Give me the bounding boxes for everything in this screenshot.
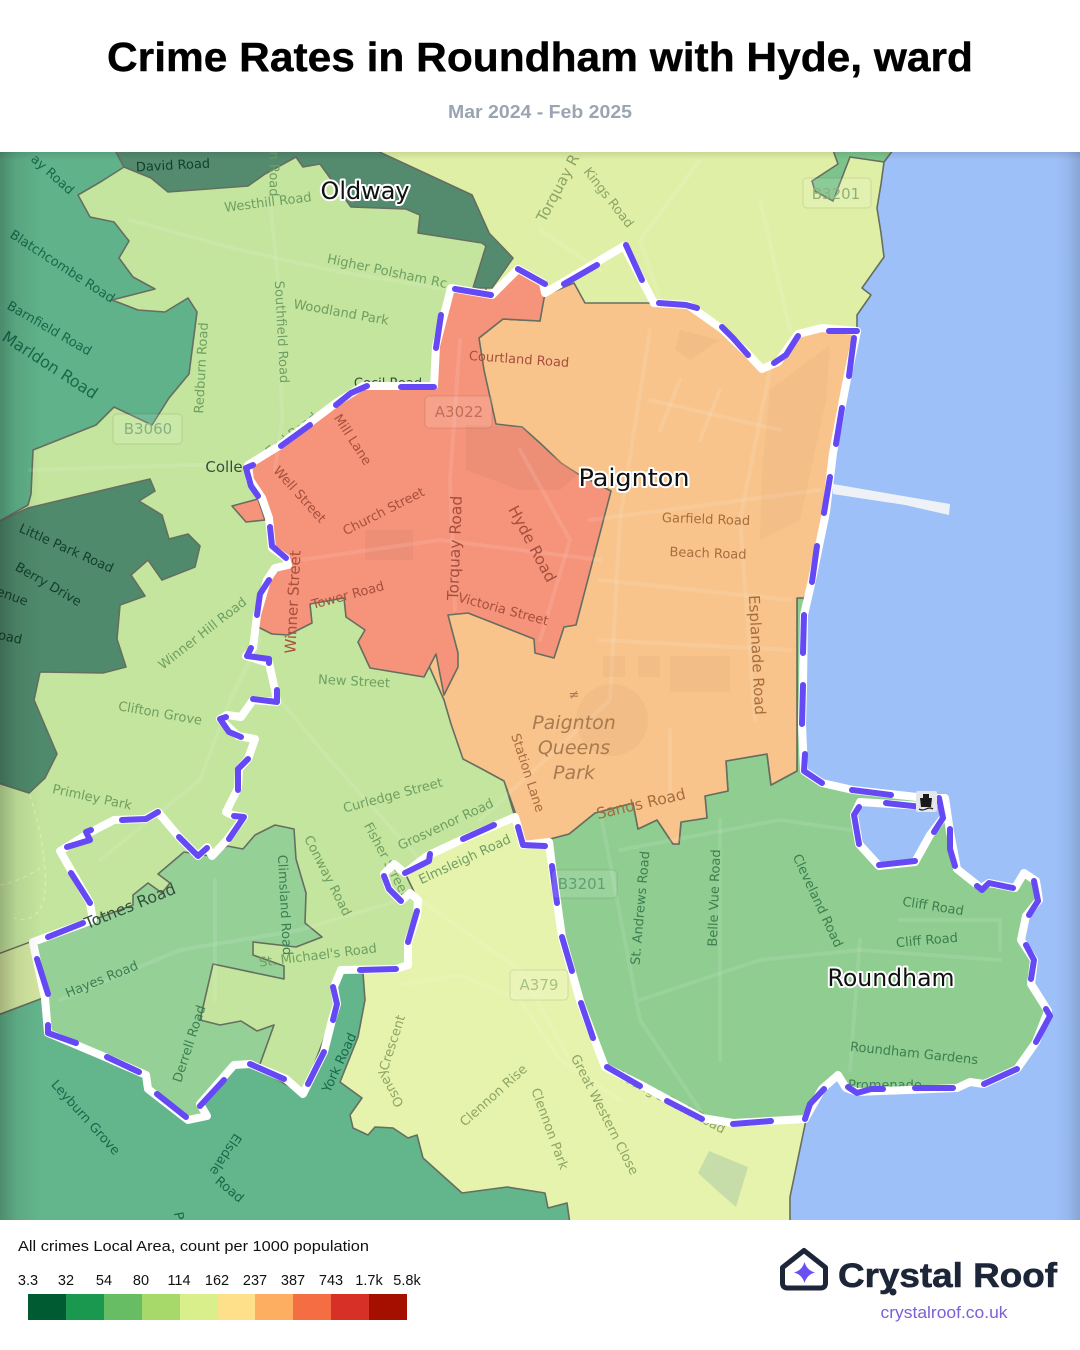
legend scale labels: 3.3 [18, 1273, 38, 1289]
legend colour ramp [28, 1294, 407, 1320]
road labels: Elsdale [206, 1130, 244, 1178]
road labels: Leyburn Grove [47, 1078, 123, 1158]
region: north dark green (Oldway) [115, 150, 513, 288]
road labels: New Street [318, 673, 390, 691]
road number labels: A3022 [435, 403, 483, 421]
harbour water [858, 806, 940, 862]
road labels: Road [212, 1174, 246, 1206]
legend scale labels: 1.7k [355, 1273, 383, 1289]
road number labels: B3201 [558, 875, 606, 893]
region: lower-left pale strip [0, 942, 41, 1013]
road labels: Colle [205, 458, 243, 476]
road labels: n Road [266, 152, 280, 196]
road labels: Southfield Road [271, 280, 291, 384]
road labels: Mill Lane [330, 412, 374, 468]
road labels: Conway Road [300, 833, 354, 919]
road labels: Well Street [270, 464, 328, 526]
orange land use patches [576, 330, 830, 756]
road labels [0, 151, 979, 1221]
road labels: Climsland Road [274, 854, 294, 956]
subtitle: date range: Mar 2024 - Feb 2025 [448, 102, 632, 122]
road labels: Osney [374, 1066, 408, 1109]
park label: Paignton Queens Park: Paignton [532, 712, 616, 734]
road labels: Tower Road [309, 579, 386, 613]
road number labels: A379 [520, 976, 558, 994]
region: small patch north-east [812, 150, 893, 201]
title: Crime Rates in Roundham with Hyde, ward [107, 34, 973, 80]
road labels: Primley Park [51, 782, 134, 814]
icon: railway station: ≠ [569, 688, 579, 703]
road labels: Garfield Road [662, 511, 750, 529]
road labels: Derrell Road [170, 1004, 210, 1084]
dashed footpaths [0, 795, 45, 920]
road boxes [113, 178, 871, 1000]
road labels: Blatchcombe Road [7, 228, 117, 306]
road labels: Berry Drive [12, 560, 84, 610]
logo: Crystal Roof [782, 1250, 1058, 1322]
map vignette [0, 152, 1080, 1220]
region: south-west teal [0, 972, 570, 1224]
road labels: Marldon Road [0, 327, 101, 403]
region: north-east pale green [382, 152, 892, 364]
road labels: Winner Street [281, 550, 305, 654]
road labels: Grosvenor Road [396, 796, 496, 854]
road network [30, 160, 1000, 1110]
road labels: Hayes Road [64, 959, 140, 1001]
ward boundary: purple dashes [37, 245, 1050, 1124]
road labels: Kings Road [580, 165, 636, 231]
sea [790, 152, 1080, 1220]
road labels: Clennon Rise [457, 1062, 531, 1130]
legend [18, 1238, 421, 1320]
road labels: Beach Road [669, 545, 747, 563]
road labels: Cliff Road [895, 931, 959, 951]
road labels: Crescent [377, 1013, 409, 1073]
road labels: Clifton Grove [117, 699, 203, 729]
road labels: Victoria Street [456, 591, 550, 629]
road labels: Cliff Road [901, 895, 965, 919]
legend scale labels: 387 [281, 1273, 305, 1289]
road labels: Higher Polsham Rc [326, 252, 448, 292]
road labels: Redburn Road [192, 322, 212, 414]
park label: Paignton Queens Park: Queens [538, 737, 610, 759]
map panel [0, 150, 1080, 1224]
road labels: Totnes Road [81, 879, 178, 933]
road labels under boundary: Cecil Road [354, 376, 422, 392]
road labels: Westhill Road [224, 190, 312, 216]
road labels: Winner Hill Road [156, 595, 250, 673]
legend scale labels: 5.8k [393, 1273, 421, 1289]
region: red detached patch [232, 499, 265, 522]
road labels: ay Road [28, 152, 76, 198]
region: town centre red [248, 269, 611, 695]
region: Hayes Road ward green [33, 825, 322, 1120]
road number labels [124, 185, 860, 994]
road labels: Sands Road [595, 785, 687, 823]
red land use patches [512, 426, 578, 474]
park label: Paignton Queens Park: Park [553, 762, 596, 784]
road labels: Woodland Park [292, 297, 390, 329]
road labels: David Road [136, 157, 210, 175]
road labels under boundary: Young's Park Road [615, 1068, 728, 1137]
road labels: Courtland Road [468, 349, 570, 371]
road labels: Great Western Close [567, 1052, 641, 1178]
place label: Roundham: Roundham [828, 964, 954, 992]
legend title: All crimes Local Area, count per 1000 population [18, 1238, 369, 1255]
region: west dark green [0, 479, 200, 793]
pier [833, 484, 950, 515]
road labels: Church Street [341, 485, 427, 539]
legend scale labels: 54 [96, 1273, 112, 1289]
place label: Paignton: Paignton [578, 464, 690, 492]
road labels under boundary: End Road [263, 410, 321, 460]
legend scale labels: 237 [243, 1273, 267, 1289]
road labels: Hyde Road [504, 503, 560, 585]
road labels under boundary: Fisher Street [360, 820, 412, 900]
road labels: Barnfield Road [4, 299, 94, 359]
road labels under boundary: Promenade [848, 1078, 922, 1094]
icon: ferry [916, 791, 937, 812]
road labels: St. Michael's Road [258, 941, 378, 971]
road labels: Little Park Road [17, 521, 115, 577]
region: Paignton orange [400, 283, 857, 845]
road labels: Torquay R [532, 151, 583, 226]
road labels: P [170, 1211, 186, 1221]
road labels: Cleveland Road [789, 852, 845, 950]
road labels: Clennon Park [527, 1086, 571, 1172]
wordmark: Crystal Roof [838, 1257, 1058, 1295]
road labels: York Road [319, 1031, 360, 1096]
legend scale labels: 114 [167, 1273, 191, 1289]
road number labels: B3060 [124, 420, 172, 438]
legend scale labels: 80 [133, 1273, 149, 1289]
road labels: Torquay Road [444, 495, 466, 602]
road labels: St. Andrews Road [629, 850, 653, 966]
road labels: Elmsleigh Road [417, 832, 513, 888]
road labels: Station Lane [507, 732, 547, 814]
road labels: Curledge Street [342, 776, 444, 816]
legend scale labels: 32 [58, 1273, 74, 1289]
road labels: Esplanade Road [745, 595, 769, 715]
region: south park patch [698, 1151, 748, 1207]
road number labels: B3201 [812, 185, 860, 203]
legend scale labels [18, 1273, 421, 1289]
legend scale labels: 162 [205, 1273, 229, 1289]
region: Roundham green [549, 598, 1048, 1123]
icon: house with star [782, 1250, 826, 1288]
place label: Oldway: Oldway [320, 177, 410, 205]
ward boundary: white casing [33, 246, 1048, 1123]
legend scale labels: 743 [319, 1273, 343, 1289]
road labels under boundary [263, 376, 922, 1137]
road labels: Belle Vue Road [706, 849, 724, 947]
region: west teal [0, 150, 197, 522]
road labels: Roundham Gardens [849, 1040, 979, 1068]
website: crystalroof.co.uk [880, 1304, 1008, 1322]
region: central light green [0, 150, 515, 1120]
region: south yellow [300, 805, 806, 1224]
park label: Paignton Queens Park [532, 715, 614, 780]
